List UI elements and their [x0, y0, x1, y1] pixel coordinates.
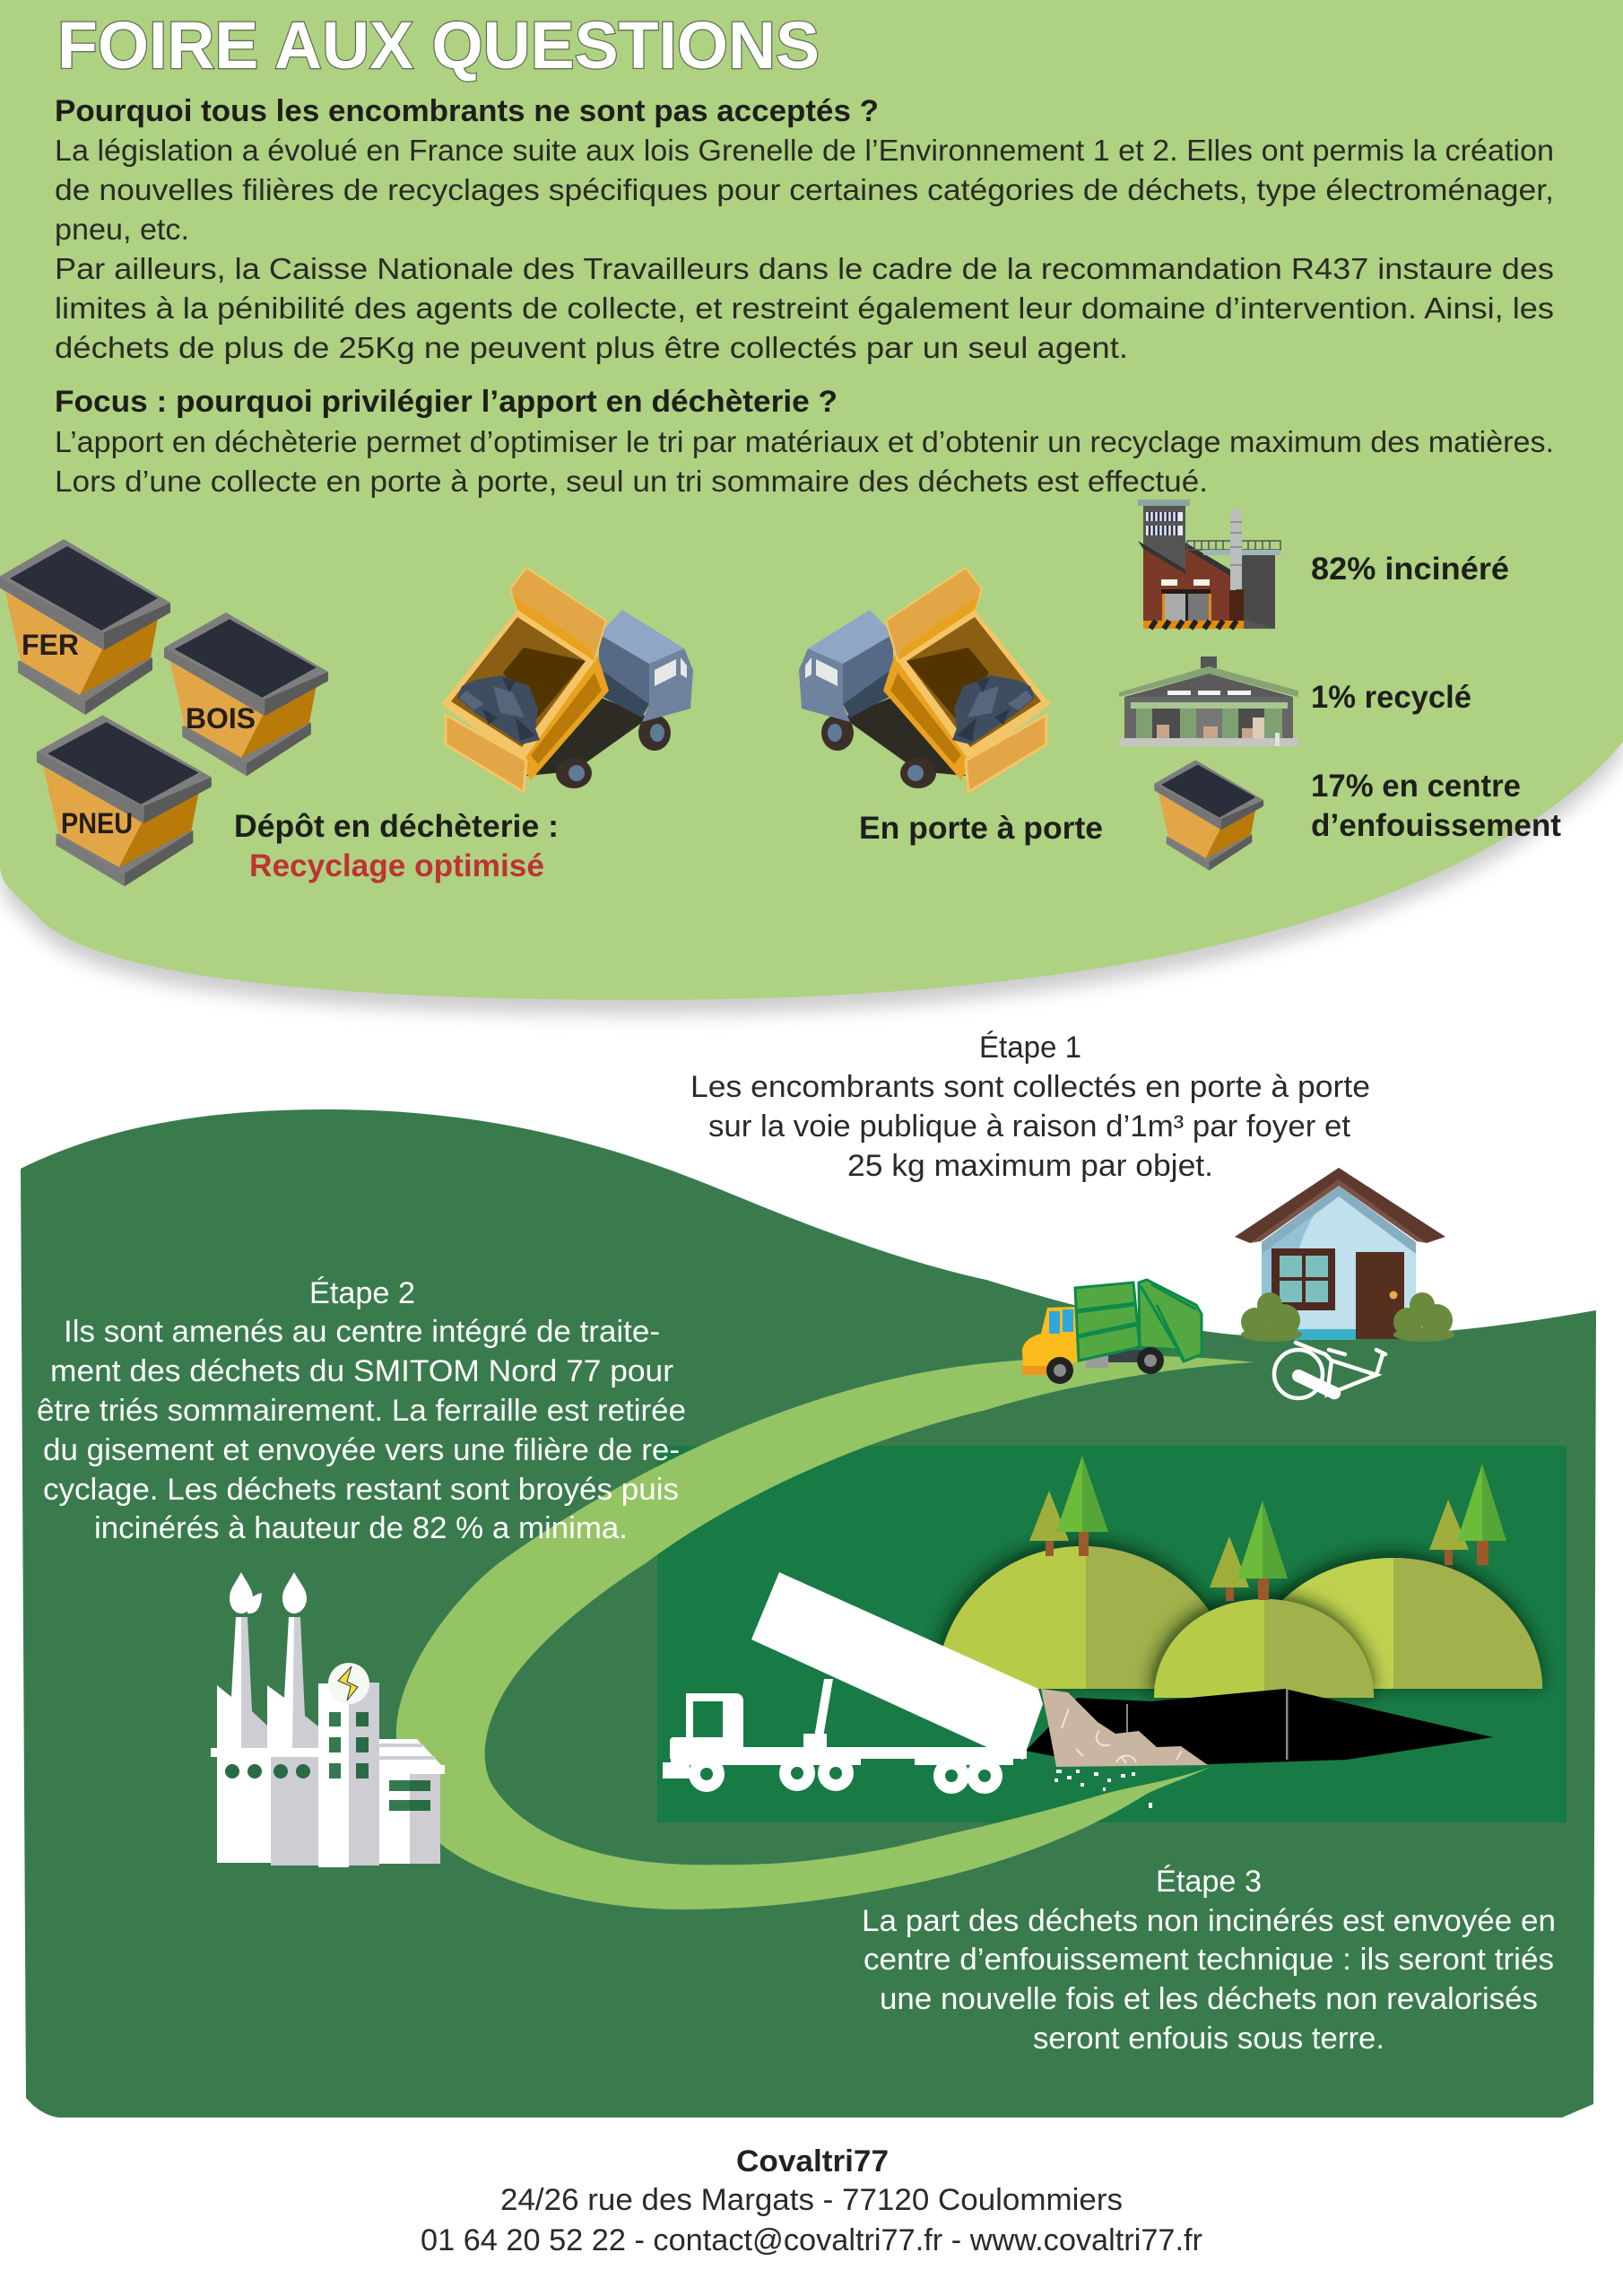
- text block: etape 2: être triés sommairement. La ferraille est retirée: [37, 1394, 686, 1428]
- text block: etape 3: seront enfouis sous terre.: [1033, 2022, 1384, 2056]
- truck wheel hubs: [700, 1767, 991, 1782]
- label: en porte a porte: En porte à porte: [859, 811, 1103, 846]
- text block: etape 3: [862, 1865, 1556, 2056]
- text block: question 1: limites à la pénibilité des agents de collecte, et restreint également leur domaine d’intervention. Ainsi, les: [55, 291, 1554, 325]
- icon: landfill bin: [1154, 760, 1263, 871]
- label: 17% enfouissement: d’enfouissement: [1311, 808, 1561, 843]
- panel: landfill scene: [657, 1446, 1567, 1822]
- text block: focus: L’apport en déchèterie permet d’optimiser le tri par matériaux et d’obtenir un recyclage maximum des matières.: [55, 425, 1554, 458]
- text block: etape 1: 25 kg maximum par objet.: [847, 1149, 1213, 1183]
- icon: bin FER: FER: [22, 629, 79, 661]
- text block: focus: Lors d’une collecte en porte à porte, seul un tri sommaire des déchets est effectué.: [55, 465, 1208, 498]
- icon: incinerator: [1138, 500, 1280, 629]
- text block: etape 3: une nouvelle fois et les déchets non revalorisés: [880, 1982, 1538, 2016]
- text block: etape 2: cyclage. Les déchets restant sont broyés puis: [43, 1473, 679, 1507]
- icon: bin FER: [0, 539, 170, 715]
- icon: dumping truck: [663, 1572, 1043, 1794]
- footer contact: 01 64 20 52 22 - contact@covaltri77.fr - www.covaltri77.fr: [421, 2223, 1202, 2257]
- icon: recycling warehouse: [1119, 657, 1298, 746]
- text block: etape 1: Les encombrants sont collectés en porte à porte: [690, 1070, 1370, 1104]
- label: depot en decheterie: Recyclage optimisé: [249, 848, 544, 883]
- text block: etape 3: centre d’enfouissement technique : ils seront triés: [864, 1943, 1554, 1977]
- text block: question 1: La législation a évolué en France suite aux lois Grenelle de l’Environnement 1 et 2. Elles ont permis la création: [55, 134, 1554, 167]
- text block: etape 2: ment des déchets du SMITOM Nord 77 pour: [50, 1354, 673, 1388]
- title: FOIRE AUX QUESTIONS: [57, 8, 820, 83]
- label: 17% enfouissement: [1311, 769, 1561, 843]
- footer contact: [421, 2144, 1202, 2257]
- footer contact: 24/26 rue des Margats - 77120 Coulommiers: [500, 2183, 1123, 2217]
- text block: question 1: de nouvelles filières de recyclages spécifiques pour certaines catégories de déchets, type électroménager,: [55, 173, 1554, 206]
- text block: etape 2: incinérés à hauteur de 82 % a minima.: [94, 1511, 628, 1545]
- text block: question 1: pneu, etc.: [55, 213, 189, 246]
- text block: etape 2: Étape 2: [309, 1276, 415, 1310]
- text block: etape 2: Ils sont amenés au centre intégré de traite-: [64, 1315, 660, 1349]
- text block: etape 2: [37, 1276, 686, 1545]
- icon: bin BOIS: [164, 613, 328, 776]
- text block: etape 1: [690, 1031, 1370, 1183]
- icon: bin PNEU: PNEU: [61, 807, 133, 839]
- label: depot en decheterie: Dépôt en déchèterie :: [234, 809, 559, 844]
- icon: dump truck left: [441, 568, 693, 792]
- hills and trees: [937, 1456, 1542, 1698]
- panel: FAQ background: [0, 0, 1623, 1014]
- text block: question 1: [55, 94, 1554, 364]
- landfill pit: [1026, 1689, 1493, 1764]
- panel: green landscape: [21, 1109, 1596, 2118]
- icon: factory: [211, 1572, 445, 1867]
- icon: house: [1235, 1168, 1454, 1342]
- text block: question 1: Pourquoi tous les encombrants ne sont pas acceptés ?: [55, 94, 879, 128]
- text block: question 1: déchets de plus de 25Kg ne peuvent plus être collectés par un seul agent.: [55, 331, 1128, 364]
- arrow: light green swoosh: [396, 1356, 1254, 1909]
- text block: etape 1: sur la voie publique à raison d’1m³ par foyer et: [708, 1109, 1351, 1144]
- label: 17% enfouissement: 17% en centre: [1311, 769, 1521, 804]
- waste pile: [1041, 1689, 1208, 1808]
- text block: question 1: Par ailleurs, la Caisse Nationale des Travailleurs dans le cadre de la recommandation R437 instaure des: [55, 252, 1554, 285]
- icon: bin PNEU: [37, 715, 212, 886]
- icon: dump truck right: [799, 568, 1051, 792]
- text block: focus: [55, 385, 1554, 498]
- icon: bicycle: [1274, 1343, 1385, 1398]
- label: depot en decheterie: [234, 809, 559, 883]
- text block: focus: Focus : pourquoi privilégier l’apport en déchèterie ?: [55, 385, 838, 419]
- label: 1% recycle: 1% recyclé: [1311, 680, 1471, 715]
- text block: etape 1: Étape 1: [979, 1031, 1081, 1065]
- text block: etape 3: Étape 3: [1156, 1865, 1262, 1899]
- label: 82% incinere: 82% incinéré: [1311, 552, 1509, 587]
- text block: etape 3: La part des déchets non incinérés est envoyée en: [862, 1904, 1556, 1938]
- footer contact: Covaltri77: [736, 2144, 889, 2179]
- text block: etape 2: du gisement et envoyée vers une filière de re-: [43, 1433, 680, 1467]
- icon: bin BOIS: BOIS: [186, 702, 256, 735]
- icon: garbage truck: [1022, 1280, 1202, 1384]
